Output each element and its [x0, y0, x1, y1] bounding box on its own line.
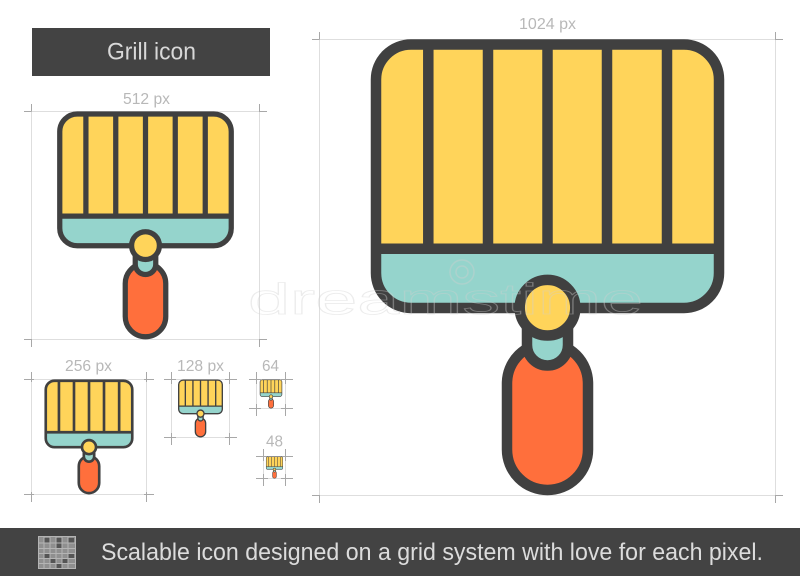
guide frame 128: [172, 380, 230, 438]
icon: pixel grid: [38, 536, 76, 569]
guide frame 1024: [320, 40, 776, 496]
watermark: [248, 260, 643, 324]
icon: grill 64: [260, 380, 282, 408]
panel: 64 px icon: [249, 358, 293, 416]
size label 48: 48: [266, 434, 283, 450]
guide frame 512: [32, 112, 260, 340]
footer text: Scalable icon designed on a grid system with love for each pixel.: [101, 539, 763, 566]
panel: 128 px icon: [164, 358, 237, 445]
title banner: [32, 28, 270, 76]
icon: grill 256: [46, 381, 132, 493]
title text: Grill icon: [107, 38, 196, 66]
size label 128 px: 128 px: [177, 358, 224, 375]
watermark: dreamstime: [248, 275, 643, 324]
panel: 256 px icon: [24, 358, 154, 502]
guide frame 256: [32, 380, 146, 494]
icon: grill 48: [266, 457, 283, 478]
icon: grill 512: [60, 114, 231, 337]
size label 1024 px: 1024 px: [519, 16, 576, 33]
guide frame 48: [264, 456, 286, 478]
icon: large grill: [376, 44, 719, 490]
panel: 48 px icon: [256, 434, 293, 486]
guide frame 64: [256, 380, 286, 408]
size label 256 px: 256 px: [65, 358, 112, 375]
panel: 512 px icon: [24, 91, 267, 347]
footer bar: [0, 528, 800, 576]
icon: grill 128: [179, 380, 222, 437]
size label 512 px: 512 px: [123, 91, 170, 108]
size label 64: 64: [262, 358, 279, 375]
